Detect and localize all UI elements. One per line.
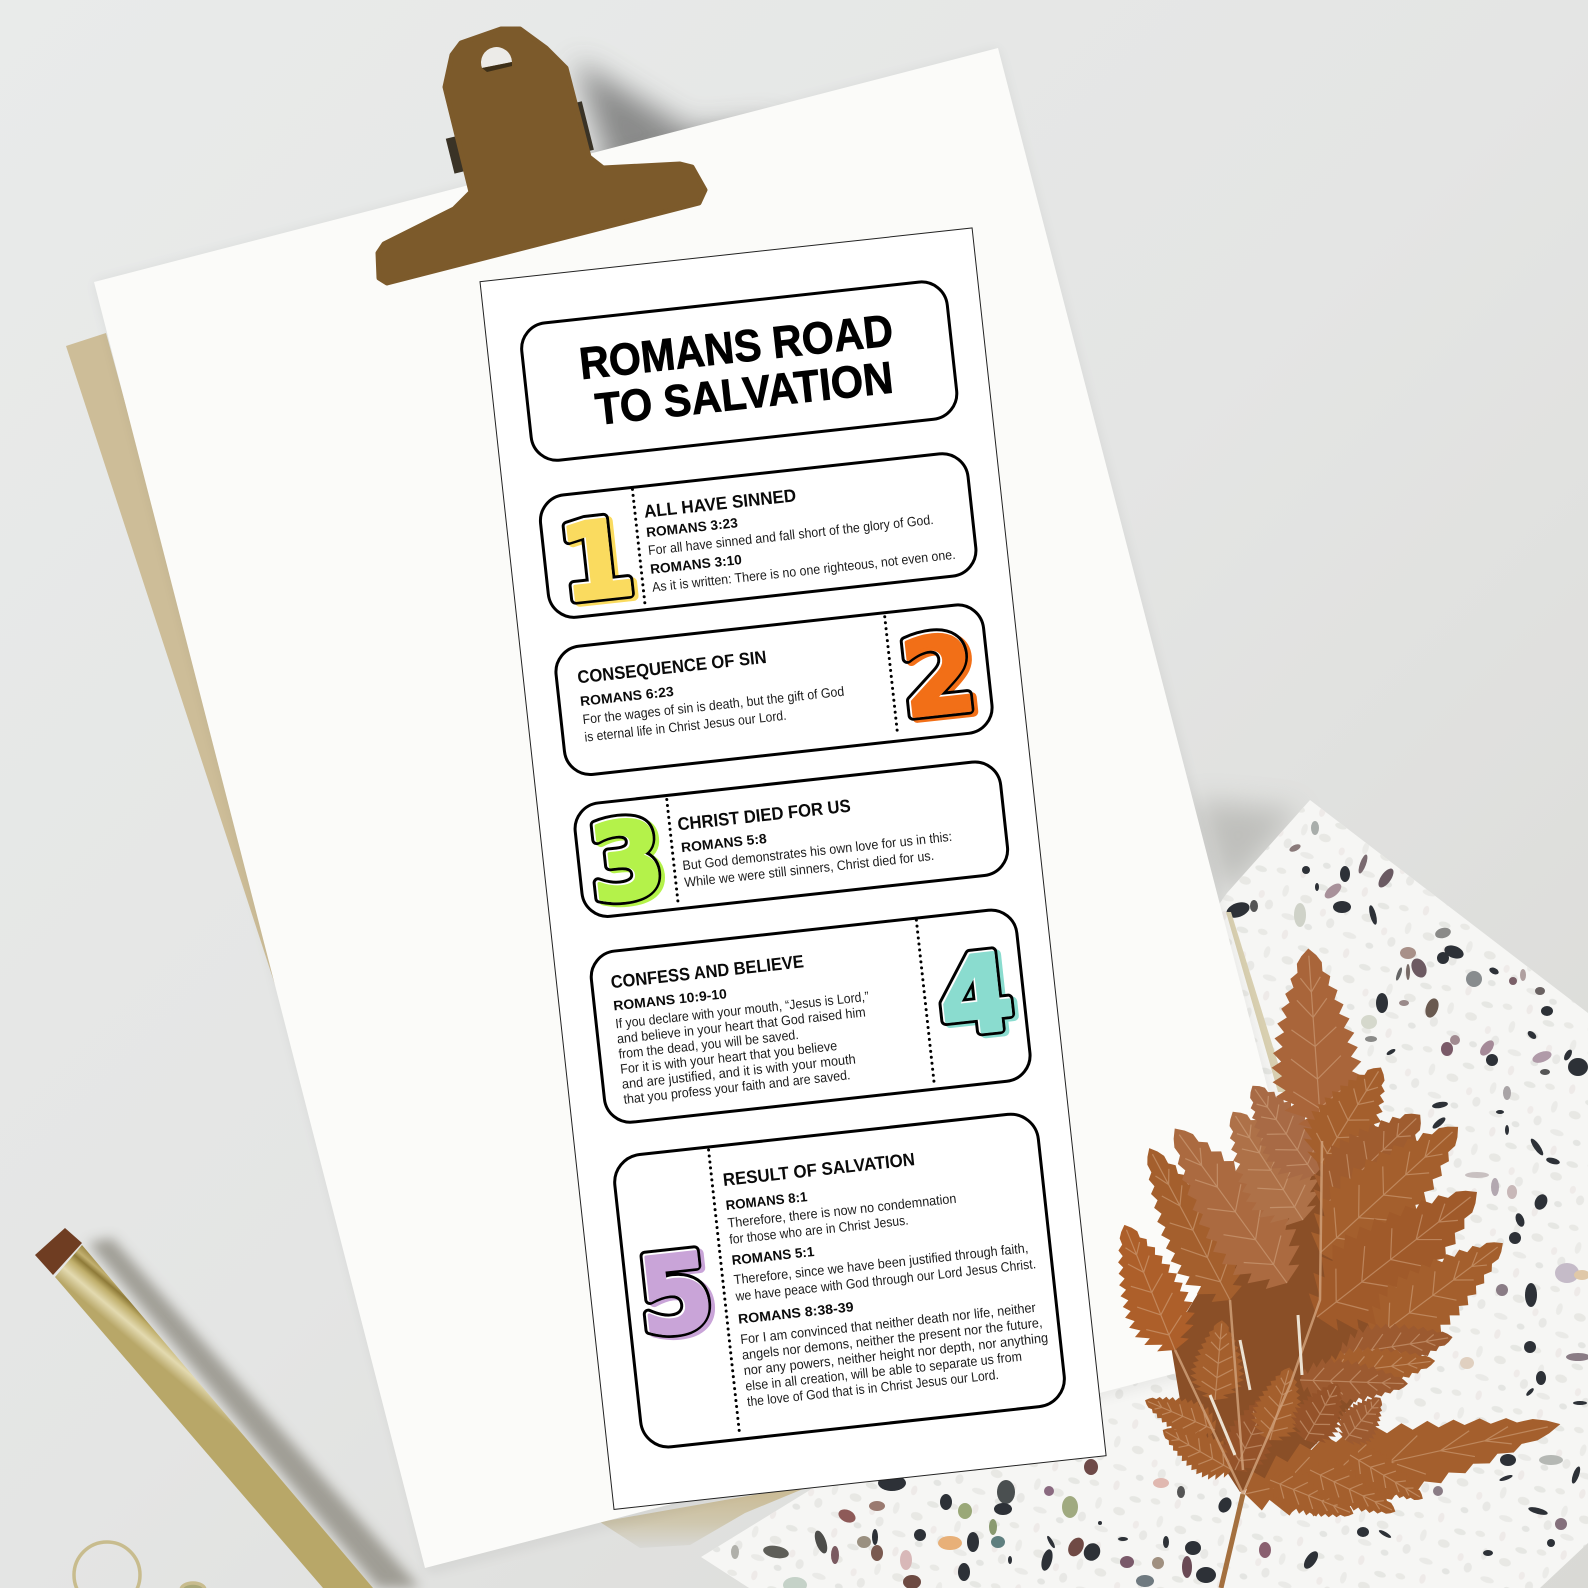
- panel: step 3 christ died for us: But God demonstrates his own love for us in this:: [682, 829, 953, 873]
- icon: paper clip ring: [74, 1542, 205, 1588]
- panel: step 4 confess and believe: If you declare with your mouth, “Jesus is Lord,”: [615, 989, 870, 1031]
- number 5: 5: [633, 1230, 719, 1360]
- kraft envelope left edge: [66, 333, 292, 1010]
- kraft envelope lower wedge: [600, 1484, 815, 1548]
- panel: step 4 confess and believe: [589, 907, 1033, 1125]
- panel: step 4 confess and believe: that you profess your faith and are saved.: [623, 1067, 851, 1107]
- panel: step 1 all have sinned: ROMANS 3:23: [645, 515, 739, 540]
- title panel: ROMANS ROAD: [577, 304, 895, 389]
- terrazzo tray: [701, 800, 1588, 1588]
- panel: step 2 consequence of sin: CONSEQUENCE OF SIN: [576, 647, 767, 687]
- icon: dried fern leaf: [1093, 945, 1569, 1588]
- panel: step 3 christ died for us: While we were still sinners, Christ died for us.: [684, 848, 935, 890]
- panel: step 5 result of salvation: Therefore, there is now no condemnation: [727, 1191, 957, 1231]
- number 2: 2: [898, 613, 985, 744]
- title panel: [519, 279, 959, 463]
- number 5: 5: [632, 1229, 718, 1359]
- number 4: 4: [932, 930, 1019, 1060]
- clipboard paper: [94, 48, 1331, 1568]
- number 2: 2: [894, 611, 981, 741]
- number 2: 2: [895, 612, 982, 742]
- number 1: 1: [553, 495, 639, 625]
- panel: step 5 result of salvation: nor any powers, neither height nor depth, nor anything: [743, 1330, 1049, 1378]
- panel: step 5 result of salvation: for those who are in Christ Jesus.: [729, 1213, 909, 1247]
- number 5: 5: [636, 1231, 723, 1362]
- number 1: 1: [554, 496, 640, 626]
- panel: step 3 christ died for us: ROMANS 5:8: [680, 831, 768, 855]
- number 3: 3: [583, 797, 670, 927]
- icon: bulldog clip: [378, 29, 705, 283]
- number 3: 3: [582, 796, 669, 926]
- number 3: 3: [582, 796, 669, 926]
- panel: step 5 result of salvation: ROMANS 8:1: [725, 1189, 809, 1213]
- number 2: 2: [894, 611, 981, 741]
- panel: step 4 confess and believe: ROMANS 10:9-10: [613, 986, 728, 1013]
- number 1: 1: [557, 498, 644, 628]
- number 5: 5: [632, 1229, 718, 1359]
- pen shadow: [88, 1238, 420, 1588]
- clip shadow on wall: [575, 60, 790, 172]
- number 4: 4: [932, 930, 1019, 1060]
- clipboard paper shadow: [94, 48, 1336, 1574]
- panel: step 5 result of salvation: ROMANS 5:1: [731, 1244, 816, 1268]
- panel: step 5 result of salvation: RESULT OF SALVATION: [722, 1149, 916, 1190]
- panel: step 3 christ died for us: [572, 758, 1011, 930]
- panel: step 1 all have sinned: As it is written: There is no one righteous, not even one.: [651, 547, 956, 595]
- title panel: TO SALVATION: [593, 352, 896, 435]
- printed card: [480, 228, 1106, 1509]
- number 4: 4: [933, 930, 1020, 1061]
- number 4: 4: [936, 932, 1023, 1062]
- icon: gold pen: [35, 1228, 373, 1588]
- panel: step 1 all have sinned: [538, 451, 980, 630]
- panel: step 2 consequence of sin: For the wages of sin is death, but the gift of God: [582, 684, 845, 727]
- number 3: 3: [587, 798, 673, 928]
- panel: step 2 consequence of sin: [553, 602, 995, 781]
- panel: step 5 result of salvation: For I am convinced that neither death nor life, neither: [740, 1300, 1037, 1347]
- panel: step 4 confess and believe: and believe in your heart that God raised him: [616, 1004, 866, 1046]
- panel: step 1 all have sinned: For all have sinned and fall short of the glory of God.: [647, 512, 934, 558]
- panel: step 5 result of salvation: else in all creation, will be able to separate us from: [745, 1349, 1023, 1394]
- number 1: 1: [553, 495, 639, 625]
- panel: step 5 result of salvation: we have peace with God through our Lord Jesus Christ.: [734, 1256, 1037, 1304]
- panel: step 5 result of salvation: [612, 1111, 1067, 1450]
- panel: step 4 confess and believe: from the dead, you will be saved.: [618, 1027, 799, 1062]
- panel: step 5 result of salvation: ROMANS 8:38-39: [737, 1299, 854, 1327]
- panel: step 4 confess and believe: CONFESS AND BELIEVE: [610, 951, 805, 992]
- panel: step 4 confess and believe: For it is with your heart that you believe: [619, 1038, 838, 1077]
- panel: step 1 all have sinned: ALL HAVE SINNED: [643, 485, 797, 522]
- kraft envelope right strip: [1226, 912, 1287, 1092]
- panel: step 3 christ died for us: CHRIST DIED FOR US: [676, 796, 852, 834]
- panel: step 2 consequence of sin: ROMANS 6:23: [579, 684, 675, 709]
- panel: step 5 result of salvation: the love of God that is in Christ Jesus our Lord.: [746, 1367, 999, 1409]
- panel: step 5 result of salvation: angels nor demons, neither the present nor the future,: [741, 1315, 1043, 1363]
- panel: step 4 confess and believe: and are justified, and it is with your mouth: [621, 1051, 856, 1092]
- panel: step 2 consequence of sin: is eternal life in Christ Jesus our Lord.: [584, 708, 787, 745]
- panel: step 1 all have sinned: ROMANS 3:10: [649, 552, 742, 577]
- wall shadow by terrazzo corner: [1195, 800, 1300, 890]
- panel: step 5 result of salvation: Therefore, since we have been justified through faith,: [733, 1240, 1029, 1287]
